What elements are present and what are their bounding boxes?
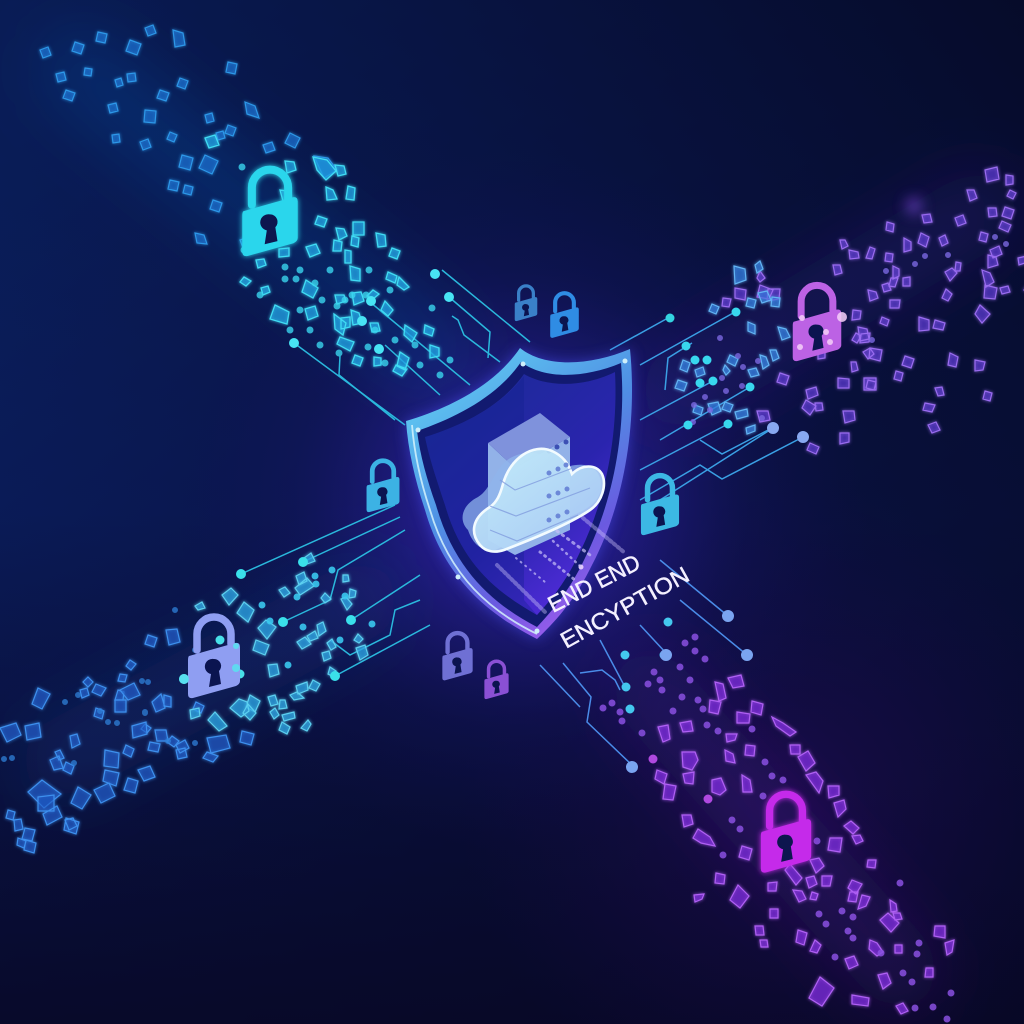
shield field [425, 372, 616, 615]
lock: right of shield [641, 476, 679, 535]
particle stream: top-right [675, 167, 1024, 454]
glow spot [906, 198, 922, 214]
lock: left of shield [367, 461, 399, 512]
lock: bottom-right magenta [761, 794, 811, 873]
circuit lines [241, 270, 803, 767]
lock: top-left cyan [242, 170, 298, 256]
lock: small bottom 1 [442, 633, 473, 680]
lock: small top 1 [515, 286, 537, 321]
shield [406, 348, 632, 639]
cloud back [463, 453, 601, 550]
shield rim [406, 348, 632, 639]
shield inner border [417, 362, 622, 627]
label line 2: ENCYPTION [556, 561, 693, 653]
particle stream: top-left [40, 25, 439, 376]
particle stream: bottom-left [0, 553, 368, 853]
label line 1: END END [543, 549, 644, 617]
lock: bottom-left lavender [179, 617, 240, 698]
data dots [497, 518, 625, 612]
lock: small top 2 [550, 293, 579, 338]
server stack [488, 413, 570, 555]
particle stream: bottom-right [655, 675, 954, 1014]
lock: top-right purple [793, 285, 847, 361]
label: END END ENCYPTION [543, 549, 693, 653]
cloud outline [474, 449, 604, 552]
lock: small bottom 2 [484, 661, 509, 699]
shield glow [406, 348, 632, 639]
